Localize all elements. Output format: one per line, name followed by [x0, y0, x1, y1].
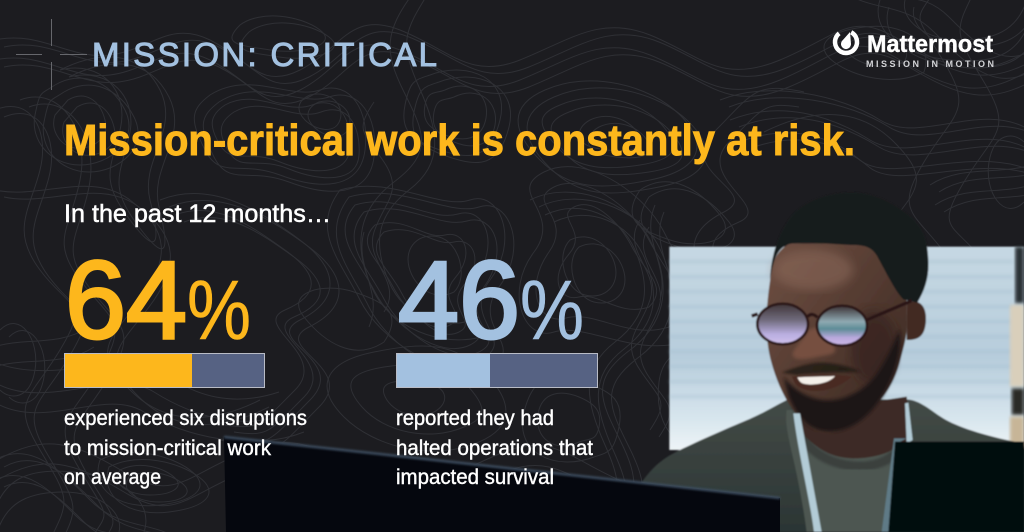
number: 46	[398, 239, 520, 362]
logo tagline: MISSION IN MOTION	[866, 59, 994, 69]
description: reported they had	[396, 407, 554, 430]
cheek shadow	[850, 310, 897, 383]
nose	[793, 327, 835, 359]
stat: 64%	[64, 239, 307, 489]
moustache	[782, 363, 861, 375]
logo: Mattermost	[831, 27, 994, 69]
smile	[792, 375, 852, 391]
ear	[907, 301, 926, 340]
main headline: Mission-critical work is constantly at risk.	[64, 116, 855, 165]
bridge and temple	[752, 301, 912, 320]
stat: 46%	[396, 239, 598, 489]
t-shirt	[786, 410, 907, 532]
beard	[783, 330, 900, 432]
description: impacted survival	[396, 466, 554, 489]
left lens	[757, 304, 808, 344]
neck	[795, 397, 912, 458]
face	[767, 243, 907, 434]
progress bar	[64, 354, 264, 388]
right lens	[817, 306, 867, 346]
photo background: window blinds	[669, 247, 1024, 450]
description	[396, 407, 593, 489]
forehead highlight	[773, 250, 853, 290]
description: halted operations that	[396, 437, 593, 460]
percent sign: %	[520, 263, 584, 357]
glasses	[752, 301, 912, 346]
progress bar	[396, 354, 598, 388]
hair	[770, 192, 928, 303]
left monitor	[224, 437, 780, 532]
description: on average	[64, 466, 161, 489]
shirt collar seam	[803, 437, 895, 466]
icon: logo mark	[831, 27, 861, 57]
right monitor	[882, 438, 1024, 532]
photo: smiling man at monitors	[640, 192, 1024, 532]
crosshair mark	[16, 19, 87, 90]
description: experienced six disruptions	[64, 407, 307, 430]
logo wordmark: Mattermost	[867, 31, 993, 58]
number: 64	[65, 239, 187, 362]
subheading: In the past 12 months…	[64, 200, 331, 228]
kicker heading: MISSION: CRITICAL	[92, 36, 437, 73]
lanyard	[793, 403, 913, 532]
sweater	[640, 399, 1024, 532]
description	[64, 407, 307, 489]
percent sign: %	[187, 263, 251, 357]
description: to mission-critical work	[64, 437, 271, 460]
